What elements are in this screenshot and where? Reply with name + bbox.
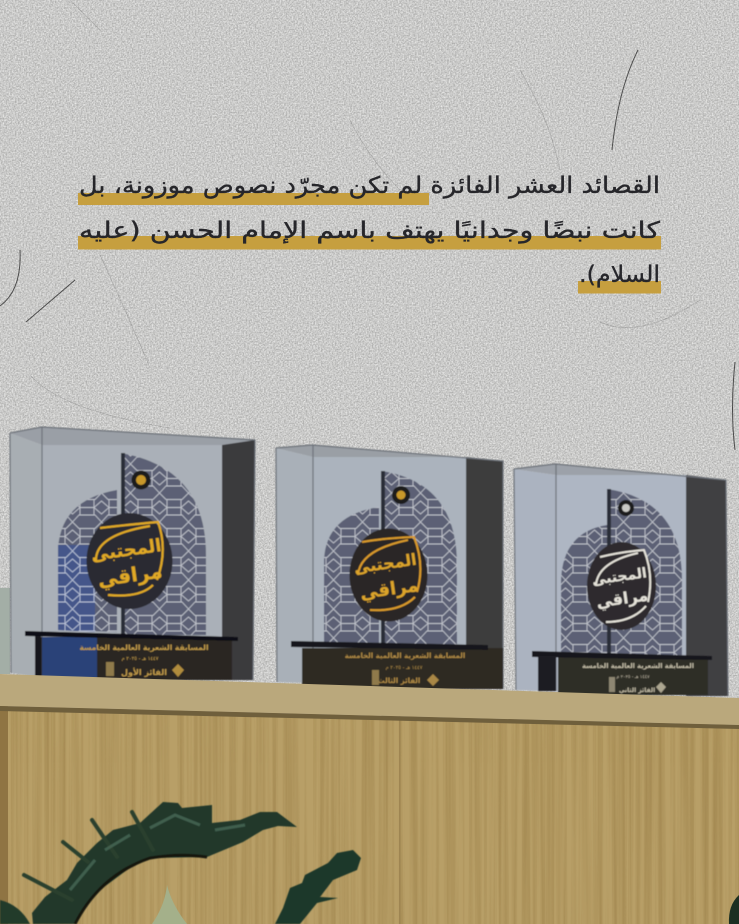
base plaque xyxy=(25,631,238,680)
plant: pale pointed leaf xyxy=(152,885,187,924)
small gold medallion xyxy=(392,486,410,504)
plant at far left behind shelf xyxy=(0,588,10,674)
base plaque: ١٤٤٧ هـ - ٢٠٢٥ م xyxy=(122,656,159,662)
wall background xyxy=(0,0,739,700)
base plaque: الفائز الأول xyxy=(121,667,167,677)
patterned arches xyxy=(561,489,682,655)
round calligraphy medallion xyxy=(587,542,656,630)
plant: large arching stem xyxy=(0,802,297,924)
highlight line 1 xyxy=(78,193,429,205)
highlight line 2 xyxy=(78,236,661,250)
round calligraphy medallion xyxy=(86,513,172,609)
base plaque: المسابقة الشعرية العالمية الخامسة xyxy=(345,652,465,660)
small gold medallion xyxy=(132,470,150,490)
round calligraphy medallion: مراقي xyxy=(595,586,649,613)
glass box xyxy=(514,464,728,696)
base plaque: ١٤٤٧ هـ - ٢٠٢٥ م xyxy=(616,675,650,680)
plant: small right stem xyxy=(275,850,361,924)
round calligraphy medallion: مراقي xyxy=(359,575,420,604)
base plaque: الفائز الثالث xyxy=(378,677,420,685)
wood panel front xyxy=(0,700,739,924)
round calligraphy medallion: المجتبى xyxy=(591,565,648,589)
round calligraphy medallion xyxy=(350,528,428,622)
plant: leaf at right edge xyxy=(729,895,739,924)
patterned arches xyxy=(58,453,206,635)
round calligraphy medallion: مراقي xyxy=(96,559,164,592)
text block: caption with highlights xyxy=(78,173,661,294)
base plaque xyxy=(532,651,712,695)
round calligraphy medallion: المجتبى xyxy=(353,550,418,577)
patterned arches xyxy=(324,471,457,645)
caption line 1: القصائد العشر الفائزة لم تكن مجرّد نصوص موزونة، بل xyxy=(79,173,660,199)
base plaque: ١٤٤٧ هـ - ٢٠٢٥ م xyxy=(386,665,423,671)
trophy 1: first place xyxy=(10,427,255,680)
glass box xyxy=(276,445,503,689)
trophy 2: third place xyxy=(276,445,503,689)
base plaque xyxy=(291,641,503,689)
round calligraphy medallion: المجتبى xyxy=(90,535,163,566)
highlight line 3 xyxy=(578,281,661,294)
base plaque: المسابقة الشعرية العالمية الخامسة xyxy=(79,643,209,652)
wooden shelf xyxy=(0,674,739,729)
small silver medallion xyxy=(618,500,634,516)
caption line 3: السلام). xyxy=(579,262,660,288)
base plaque: الفائز الثاني xyxy=(619,687,655,694)
glass box xyxy=(10,427,255,680)
caption line 2: كانت نبضًا وجدانيًا يهتف باسم الإمام الحسن (عليه xyxy=(79,218,660,244)
trophy 3: second place xyxy=(514,464,728,696)
base plaque: المسابقة الشعرية العالمية الخامسة xyxy=(582,662,694,670)
